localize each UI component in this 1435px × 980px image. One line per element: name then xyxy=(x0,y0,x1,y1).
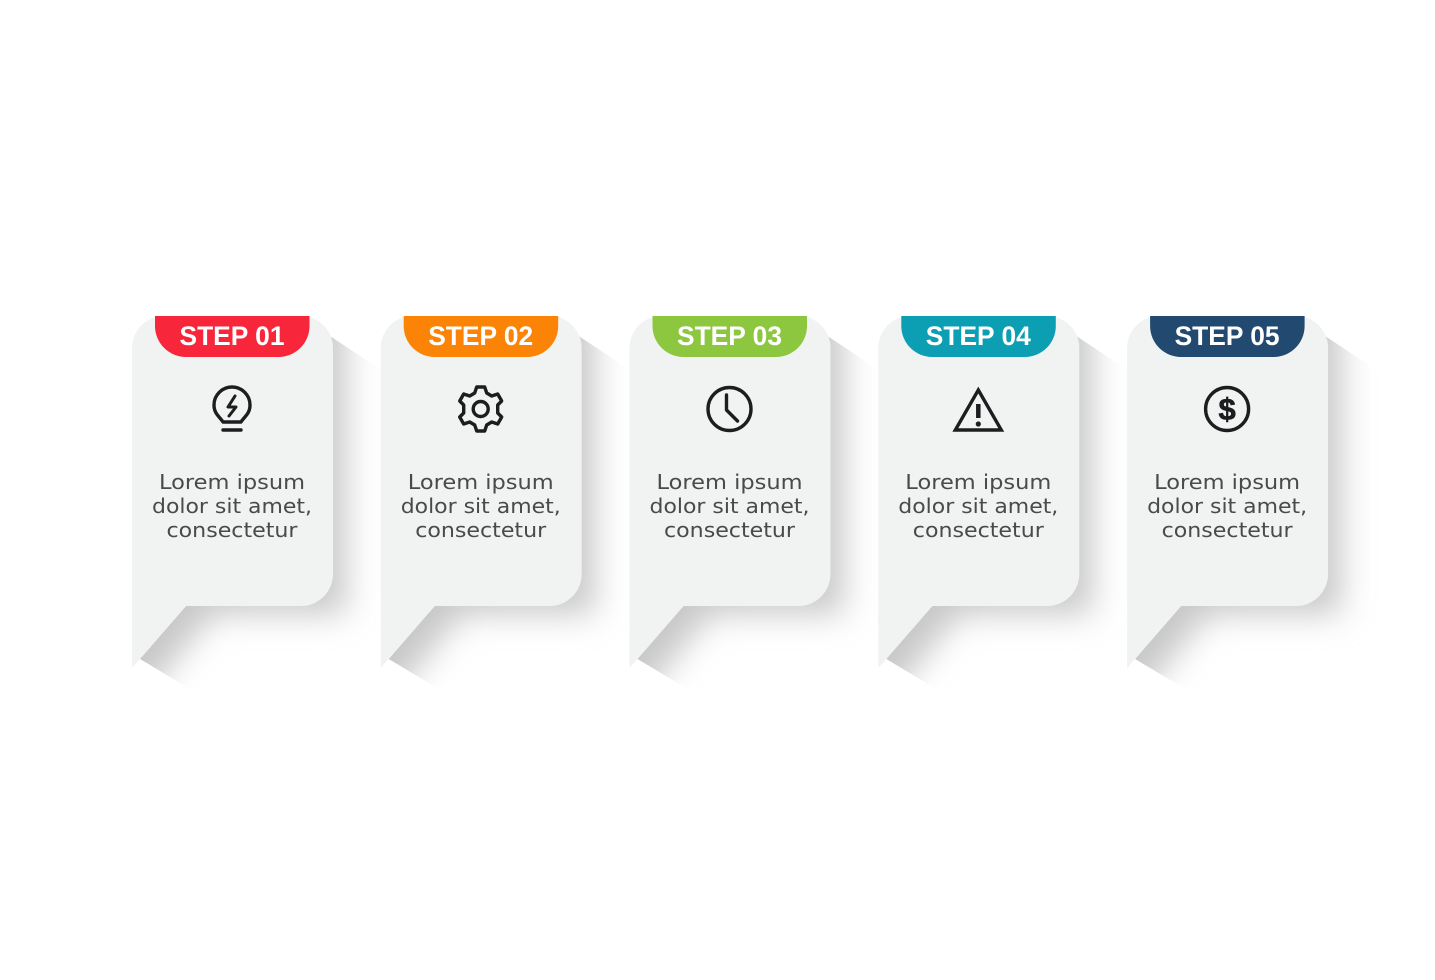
card 3 shadow xyxy=(638,336,860,682)
card 1 panel xyxy=(132,316,333,668)
card 5 heading: STEP 05 xyxy=(1175,321,1280,351)
card 1 text: dolor sit amet, xyxy=(152,494,312,518)
card 1: step 01 xyxy=(132,316,362,682)
card 2 shadow xyxy=(389,336,611,681)
card 2 header tab xyxy=(404,316,558,357)
icon: warning triangle xyxy=(955,390,1001,430)
card 1 text: consectetur xyxy=(166,518,298,542)
card 2 text: consectetur xyxy=(415,518,547,542)
card 2 text: dolor sit amet, xyxy=(401,494,561,518)
card 1 text: Lorem ipsum xyxy=(159,470,305,494)
card 3 text: Lorem ipsum xyxy=(656,470,802,494)
card 3 panel xyxy=(630,316,830,668)
card 4: step 04 xyxy=(878,316,1108,681)
card 2: step 02 xyxy=(380,316,611,681)
card 2 text: Lorem ipsum xyxy=(408,470,554,494)
icon: clock xyxy=(708,388,751,430)
card 2 heading: STEP 02 xyxy=(428,321,533,351)
card 4 header tab xyxy=(901,316,1056,357)
card 3 header tab xyxy=(652,316,807,357)
card 4 text: consectetur xyxy=(913,518,1045,542)
card 5 text: dolor sit amet, xyxy=(1147,494,1307,518)
card 1 shadow xyxy=(140,336,362,682)
card 2 panel xyxy=(381,316,582,668)
card 3: step 03 xyxy=(630,316,860,682)
icon: gear xyxy=(460,387,502,431)
card 1 heading: STEP 01 xyxy=(180,321,284,351)
icon: dollar coin xyxy=(1206,388,1249,430)
card 5 shadow xyxy=(1135,336,1357,682)
card 3 text: consectetur xyxy=(664,518,796,542)
card 5: step 05 xyxy=(1127,316,1357,682)
card 4 shadow xyxy=(886,336,1108,681)
card 5 text: Lorem ipsum xyxy=(1154,470,1300,494)
card 5 panel xyxy=(1127,316,1328,668)
card 1 header tab xyxy=(155,316,310,357)
card 4 text: dolor sit amet, xyxy=(898,494,1058,518)
card 4 panel xyxy=(878,316,1079,668)
card 4 text: Lorem ipsum xyxy=(905,470,1051,494)
card 3 heading: STEP 03 xyxy=(677,321,782,351)
icon: dollar coin: $ xyxy=(1218,392,1236,426)
card 5 text: consectetur xyxy=(1162,518,1293,542)
card 4 heading: STEP 04 xyxy=(926,321,1031,351)
icon: light bulb xyxy=(214,387,250,430)
card 5 header tab xyxy=(1150,316,1305,357)
card 3 text: dolor sit amet, xyxy=(650,494,810,518)
